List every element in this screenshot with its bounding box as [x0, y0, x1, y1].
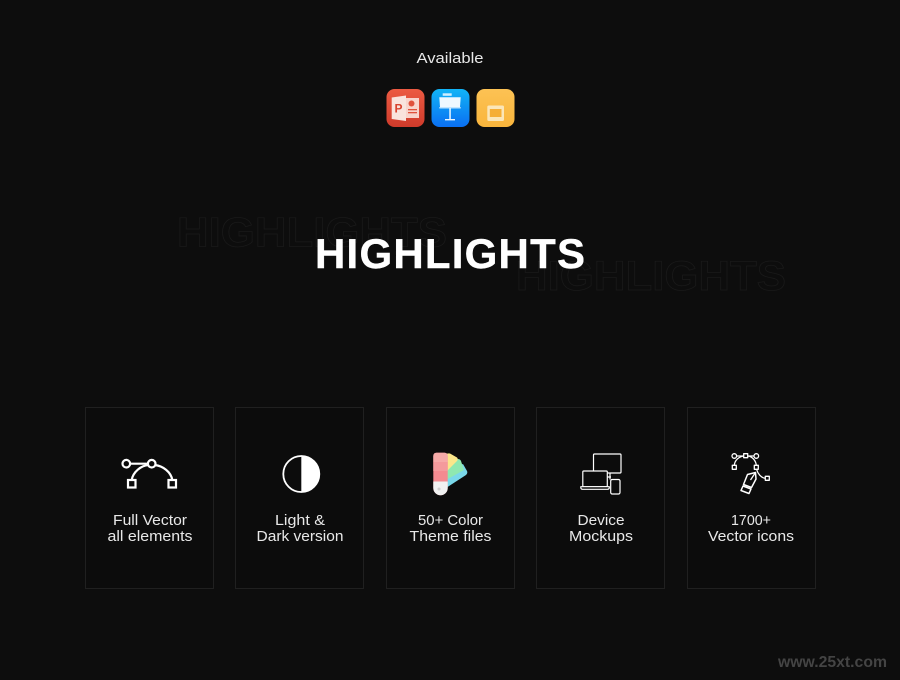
- panel: light and dark: [236, 408, 364, 588]
- icon: pen tool: [732, 454, 769, 494]
- label: full vector: all elements: [108, 529, 192, 545]
- label: vector icons: Vector icons: [708, 529, 794, 545]
- icon: Google Slides: [476, 89, 514, 127]
- label: full vector: [108, 513, 192, 545]
- icon: Keynote: [432, 89, 470, 127]
- panel: full vector: [86, 408, 214, 588]
- label: color themes: Theme files: [410, 529, 492, 545]
- label: device mockups: [569, 513, 633, 545]
- app icons row: [386, 89, 514, 127]
- panel: device mockups: [536, 408, 664, 588]
- label: light and dark: [256, 513, 344, 545]
- label: light and dark: Light &: [275, 513, 325, 529]
- label: color themes: 50+ Color: [418, 513, 483, 529]
- icon: devices: [581, 454, 621, 494]
- label: color themes: [410, 513, 492, 545]
- icon: color swatch fan: [433, 453, 467, 495]
- icon: PowerPoint: P: [394, 102, 403, 116]
- label: full vector: Full Vector: [113, 513, 187, 529]
- ghost heading: left outline: HIGHLIGHTS: [177, 208, 447, 256]
- watermark: www.25xt.com: [777, 654, 887, 671]
- panel: vector icons: [688, 408, 816, 588]
- label: device mockups: Mockups: [569, 529, 633, 545]
- icon: half circle: [283, 456, 320, 492]
- label: vector icons: [708, 513, 794, 545]
- label: light and dark: Dark version: [256, 529, 344, 545]
- panel: color themes: [386, 408, 514, 588]
- label: device mockups: Device: [578, 513, 624, 529]
- heading: Available: Available: [416, 50, 484, 67]
- title: HIGHLIGHTS: [315, 230, 585, 277]
- ghost heading: right outline: HIGHLIGHTS: [516, 252, 786, 299]
- icon: bezier curve: [122, 460, 176, 488]
- label: vector icons: 1700+: [731, 513, 771, 529]
